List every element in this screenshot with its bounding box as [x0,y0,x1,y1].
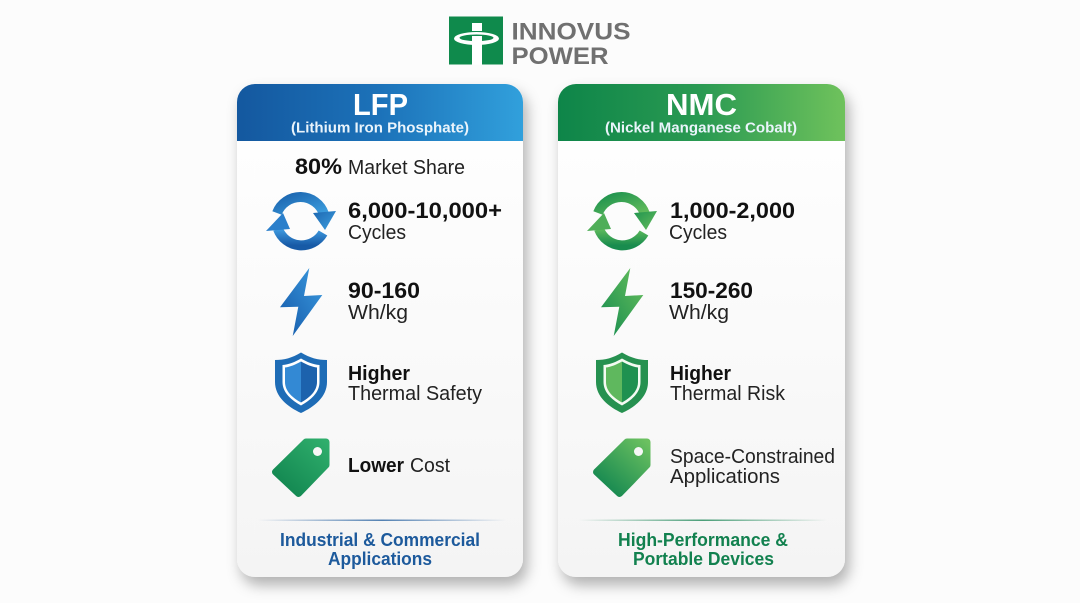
thermal safety stat: Thermal Safety [348,383,482,405]
card background [558,84,845,577]
card background [237,84,523,577]
logo: Innovus Power [449,16,630,70]
cost stat: Lower [348,455,404,477]
logo mark [449,16,503,64]
LFP applications: Applications [328,549,432,569]
icon: price tag [596,442,647,494]
thermal risk stat: Thermal Risk [670,383,786,405]
use case stat [670,446,835,488]
thermal risk stat: Higher [670,363,731,385]
icon: shield [275,352,327,413]
energy density stat [669,278,753,324]
NMC header [558,84,845,141]
energy density stat [348,278,420,324]
cycles stat: Cycles [348,222,406,244]
market share: Market Share [348,157,465,179]
LFP header: LFP [353,87,408,122]
cost stat [348,455,450,477]
thermal safety stat: Higher [348,363,410,385]
cycles stat: 1,000-2,000 [670,198,795,223]
use case stat: Space-Constrained [670,446,835,468]
LFP applications [280,530,480,569]
icon: shield [596,352,648,413]
NMC header: (Nickel Manganese Cobalt) [605,120,797,136]
icon: cycle arrows [266,197,336,245]
LFP header [237,84,523,141]
NMC header: NMC [666,87,737,122]
cost stat: Cost [410,455,450,477]
thermal safety stat [348,363,482,405]
energy density stat: 150-260 [670,278,753,303]
cycles stat [669,198,795,244]
NMC applications: Portable Devices [633,549,774,569]
NMC applications: High-Performance & [618,530,788,550]
market share: 80% [295,154,342,179]
use case stat: Applications [670,466,780,488]
logo wordmark: INNOVUS [512,18,630,46]
NMC applications [618,530,788,569]
energy density stat: 90-160 [348,278,420,303]
logo wordmark [512,18,630,70]
energy density stat: Wh/kg [348,302,408,324]
panel: NMC [558,84,845,577]
icon: price tag [276,442,326,494]
LFP applications: Industrial & Commercial [280,530,480,550]
cycles stat: Cycles [669,222,727,244]
thermal risk stat [670,363,786,405]
icon: lightning bolt [280,268,322,336]
cycles stat: 6,000-10,000+ [348,198,502,223]
LFP header: (Lithium Iron Phosphate) [291,120,469,136]
panel: LFP [237,84,523,577]
icon: lightning bolt [601,268,643,336]
cycles stat [348,198,502,244]
market share [295,154,465,179]
energy density stat: Wh/kg [669,302,729,324]
icon: cycle arrows [587,197,657,245]
logo wordmark: POWER [512,43,608,70]
